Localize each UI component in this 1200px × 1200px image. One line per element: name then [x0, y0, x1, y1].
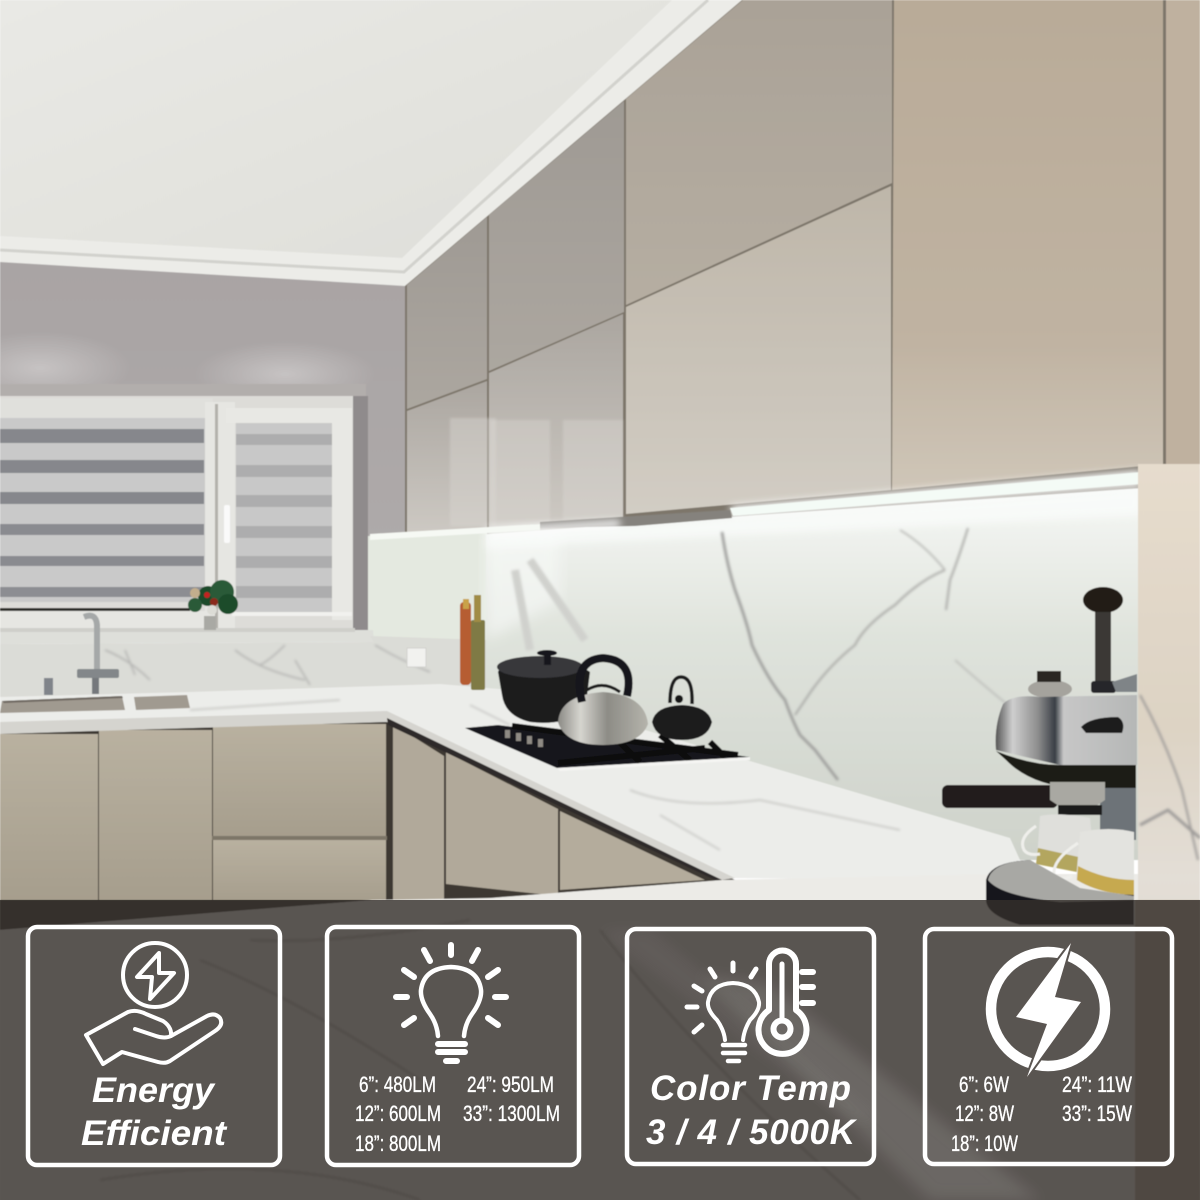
cooktop	[465, 725, 750, 771]
ceiling	[0, 0, 760, 300]
wattage list: 24”: 11W	[1062, 1072, 1132, 1097]
right blind	[226, 408, 352, 620]
light reflections on counter	[700, 975, 1040, 1200]
water tank knob and stem	[1083, 587, 1123, 613]
heading: efficient: Efficient	[81, 1114, 227, 1153]
heading: temperature values: 3 / 4 / 5000K	[646, 1113, 858, 1152]
window sill	[0, 630, 374, 644]
upper cabinets	[405, 0, 1200, 540]
under-counter shadow base	[0, 710, 735, 905]
icon: lightning bolt in circle	[991, 943, 1105, 1077]
window reflections in cabinets	[450, 418, 496, 526]
icon: bolt in circle over hand	[86, 943, 221, 1064]
translucent feature band	[0, 900, 1200, 1200]
teapot	[652, 677, 712, 740]
bottles	[460, 595, 485, 690]
wattage list: 18”: 10W	[951, 1131, 1018, 1156]
wall	[0, 262, 408, 562]
panel: energy efficient	[28, 927, 280, 1165]
icon: light bulb	[396, 945, 506, 1061]
left blind	[0, 398, 213, 631]
lumen list: 33”: 1300LM	[463, 1101, 560, 1126]
right wall block	[1135, 464, 1200, 1200]
wattage list: 12”: 8W	[955, 1101, 1014, 1126]
sink	[0, 695, 190, 713]
drip tray	[986, 860, 1134, 925]
lumen list: 12”: 600LM	[355, 1101, 441, 1126]
heading: energy: Energy	[92, 1071, 216, 1110]
wattage list: 6”: 6W	[959, 1072, 1009, 1097]
lower marble backsplash	[0, 636, 486, 705]
panel: wattage by length	[925, 929, 1172, 1164]
coffee machine	[942, 587, 1137, 925]
lumen list: 24”: 950LM	[467, 1072, 554, 1097]
foreground marble veins	[100, 920, 860, 1200]
handle	[224, 505, 230, 543]
pot	[497, 650, 590, 723]
marble counter top	[0, 684, 1020, 880]
light switch	[407, 648, 426, 667]
window frame	[205, 402, 235, 630]
crown moulding	[0, 0, 742, 286]
faucet	[44, 616, 119, 695]
wattage list	[951, 1072, 1132, 1156]
heading: color temp: Color Temp	[650, 1069, 851, 1108]
LED light strip	[370, 470, 1141, 540]
lumen list	[355, 1072, 560, 1156]
wattage list: 33”: 15W	[1062, 1101, 1132, 1126]
lumen list: 18”: 800LM	[355, 1131, 441, 1156]
plant ornament	[188, 580, 238, 630]
cups	[1022, 814, 1134, 895]
lower cabinets	[0, 724, 705, 905]
marble backsplash right	[486, 488, 1142, 860]
lower counter foreground	[0, 874, 1140, 1200]
left glass splash	[368, 531, 487, 700]
marble veins	[515, 528, 1040, 780]
lumen list: 6”: 480LM	[359, 1072, 436, 1097]
panel: lumens by length	[327, 927, 579, 1165]
panel: color temperature	[627, 929, 874, 1164]
kettle	[558, 658, 648, 745]
window with blinds	[0, 384, 368, 636]
icon: bulb and thermometer	[687, 950, 813, 1061]
dark shadow wedge at top-left of band	[0, 900, 372, 930]
